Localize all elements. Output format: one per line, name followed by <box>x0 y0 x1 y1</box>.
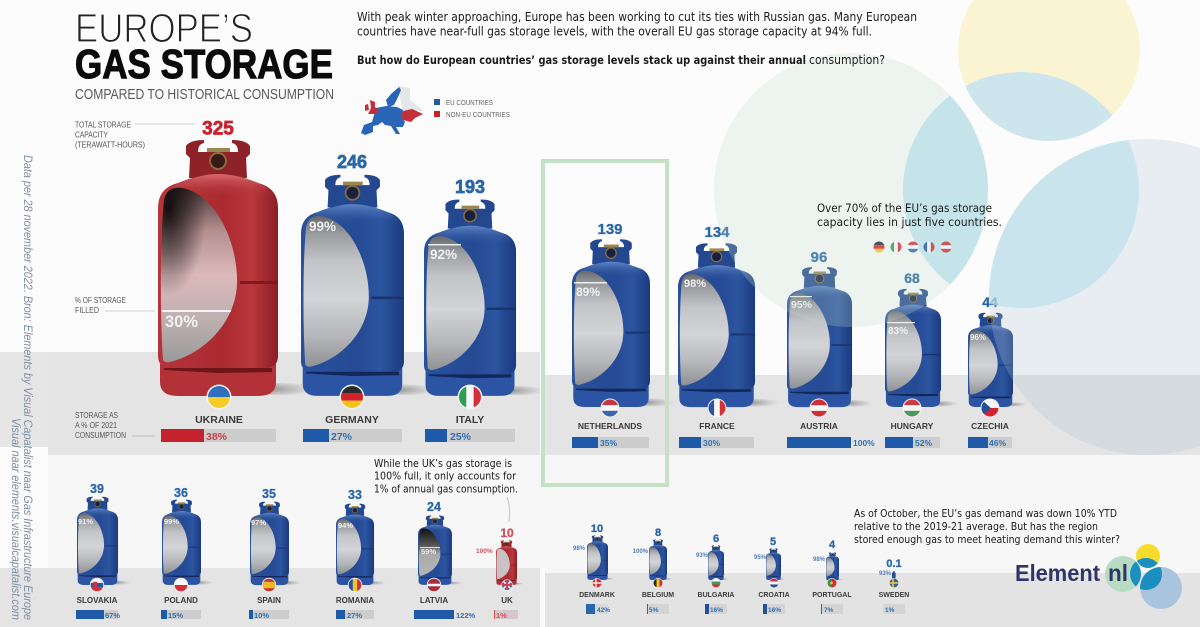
bar: France <box>679 437 754 448</box>
country: UK <box>476 526 524 620</box>
name: Ukraine: UKRAINE <box>195 414 243 426</box>
title: EUROPE’S <box>75 5 253 51</box>
bar: Italy: 25% <box>450 431 472 443</box>
cylinder: Italy <box>424 200 545 396</box>
capacity: Portugal: 4 <box>829 539 836 551</box>
cylinder: Hungary <box>885 289 959 407</box>
country: Slovakia <box>76 482 131 620</box>
title: GAS STORAGE <box>75 41 333 87</box>
bar: Austria: 100% <box>853 438 875 448</box>
flag: Austria <box>810 398 828 418</box>
flag: Hungary <box>902 398 922 418</box>
capacity: Croatia: 5 <box>770 536 776 548</box>
callout: UK: 1% of annual gas consumption. <box>374 484 518 496</box>
country: Belgium <box>633 527 674 614</box>
name: France: FRANCE <box>699 421 735 431</box>
legend: non-EU countries <box>434 111 510 119</box>
bar: Ukraine <box>161 429 276 443</box>
fill level: Netherlands: 89% <box>576 285 600 299</box>
legend: EU countries <box>434 99 493 107</box>
capacity: Austria: 96 <box>811 249 827 266</box>
bar: Croatia: 16% <box>768 607 781 614</box>
bar: Denmark: 42% <box>597 607 610 614</box>
annotation: percent of storage filled: % OF STORAGE <box>75 295 126 305</box>
capacity: Germany: 246 <box>337 152 367 172</box>
bar: Netherlands <box>572 437 649 448</box>
bar: UK: 1% <box>496 611 507 620</box>
flag: Slovakia <box>90 578 104 592</box>
text block: introduction: countries have near-full gas storage levels, with the overall EU gas storage capacity at 94% full. <box>357 24 872 38</box>
cylinder: Austria <box>787 267 873 407</box>
bar: Belgium: 5% <box>649 607 659 614</box>
map: Europe <box>361 86 424 135</box>
fill level: Croatia: 95% <box>754 555 767 561</box>
capacity: Bulgaria: 6 <box>713 533 719 545</box>
flag: Croatia <box>769 578 779 588</box>
fill level: Hungary <box>887 322 915 337</box>
cylinder: Belgium <box>649 539 673 580</box>
cylinder: Spain <box>250 502 301 585</box>
capacity: Latvia: 24 <box>427 500 441 514</box>
name: Belgium: BELGIUM <box>642 592 674 599</box>
bar: Ukraine: 38% <box>206 431 228 443</box>
country: Poland <box>161 486 213 620</box>
fill level: Spain: 97% <box>251 518 266 527</box>
bar: Hungary <box>885 437 940 448</box>
bar: Sweden: 1% <box>885 607 895 614</box>
fill level: Latvia: 59% <box>421 547 436 556</box>
bar: Bulgaria: 16% <box>710 607 723 614</box>
annotation: total storage capacity <box>75 120 195 150</box>
fill level: Bulgaria: 93% <box>696 553 709 559</box>
map legend <box>361 86 510 135</box>
flag: Sweden <box>889 578 899 588</box>
name: Spain: SPAIN <box>257 596 281 605</box>
cylinder: Poland <box>162 500 213 585</box>
bar: Slovakia: 67% <box>105 611 120 620</box>
flag: France <box>708 398 726 418</box>
fill level: Czechia: 96% <box>970 333 986 342</box>
annotation: percent of storage filled <box>75 295 155 315</box>
capacity: Poland: 36 <box>174 486 188 500</box>
logo: Element nl <box>1015 544 1182 609</box>
country: Romania <box>336 488 386 620</box>
bar: Germany <box>303 429 402 443</box>
capacity: France: 134 <box>704 224 730 241</box>
callout: five countries: capacity lies in just five countries. <box>817 215 1002 229</box>
annotation: total storage capacity: TOTAL STORAGE <box>75 120 131 130</box>
callout: five countries: Over 70% of the EU’s gas storage <box>817 201 992 215</box>
bar: Netherlands: 35% <box>600 438 617 448</box>
country: Austria <box>787 249 875 448</box>
annotation: storage as percent of consumption: STORAGE AS <box>75 410 118 420</box>
fill level: UK: 100% <box>476 548 493 555</box>
name: Hungary: HUNGARY <box>891 421 934 431</box>
flag: Germany <box>340 384 364 410</box>
callout: October demand <box>854 508 1120 546</box>
bar: Italy <box>425 429 515 443</box>
bar: Germany: 27% <box>331 431 353 443</box>
source note: Visual naar elements.visualcapatalist.com <box>9 418 21 620</box>
capacity: Ukraine: 325 <box>202 118 234 140</box>
text block: introduction: consumption? <box>809 53 885 67</box>
callout: October demand: As of October, the EU’s gas demand was down 10% YTD <box>854 508 1117 520</box>
cylinder: UK <box>496 540 524 585</box>
capacity: Romania: 33 <box>348 488 362 502</box>
cylinder: Slovakia <box>77 497 131 585</box>
fill level: Germany: 99% <box>309 219 336 234</box>
bar: Latvia: 122% <box>456 611 476 620</box>
fill level: Italy <box>428 244 461 262</box>
annotation: total storage capacity: (TERAWATT-HOURS) <box>75 140 145 150</box>
name: UK: UK <box>501 596 513 605</box>
source note <box>9 155 33 620</box>
fill level: Ukraine: 30% <box>165 313 198 331</box>
flag: Czechia <box>980 398 1000 418</box>
callout: UK <box>374 458 518 522</box>
cylinder: France <box>678 243 779 407</box>
cylinder: Czechia <box>968 313 1027 407</box>
country: Croatia <box>754 536 790 614</box>
flag: Denmark <box>592 578 602 588</box>
annotation: storage as percent of consumption: CONSUMPTION <box>75 430 126 440</box>
callout: October demand: relative to the 2019-21 average. But has the region <box>854 521 1098 533</box>
annotation: percent of storage filled: FILLED <box>75 305 99 315</box>
flag: Spain <box>262 578 276 592</box>
name: Austria: AUSTRIA <box>800 421 838 431</box>
panel: top row cylinders (left) <box>75 118 545 443</box>
fill level: Slovakia: 91% <box>78 517 93 526</box>
cylinder: Bulgaria <box>708 545 729 580</box>
name: Denmark: DENMARK <box>579 592 615 599</box>
cylinder: Denmark <box>587 535 615 580</box>
fill level: Poland: 99% <box>164 517 179 526</box>
name: Portugal: PORTUGAL <box>812 592 852 599</box>
flag: UK <box>501 579 513 591</box>
capacity: Sweden: 0.1 <box>886 558 902 570</box>
fill level: Italy: 92% <box>430 247 457 262</box>
flag: Bulgaria <box>711 578 721 588</box>
legend: EU countries: EU COUNTRIES <box>446 100 493 107</box>
fill level: Sweden: 93% <box>879 571 892 577</box>
annotation: storage as percent of consumption: A % OF 2021 <box>75 420 117 430</box>
icons: five flags <box>874 242 952 252</box>
fill level: France: 98% <box>684 278 706 290</box>
title: COMPARED TO HISTORICAL CONSUMPTION <box>75 87 334 103</box>
capacity: Italy: 193 <box>455 177 485 197</box>
capacity: Slovakia: 39 <box>90 482 104 496</box>
title <box>75 5 334 103</box>
cylinder: Sweden <box>892 571 897 579</box>
flag: Portugal <box>827 578 837 588</box>
country: Netherlands <box>572 221 675 448</box>
bar: Portugal: 7% <box>824 607 834 614</box>
panel: lower-right cylinders <box>573 523 909 614</box>
cylinder: Portugal <box>826 552 843 580</box>
cylinder: Germany <box>301 175 437 396</box>
capacity: Czechia: 44 <box>982 294 998 310</box>
country: Czechia <box>968 294 1027 448</box>
country: Sweden <box>879 558 909 614</box>
country: Latvia <box>414 500 476 620</box>
fill level: Belgium: 100% <box>633 549 649 555</box>
arrow: UK callout <box>507 497 510 522</box>
name: Croatia: CROATIA <box>758 592 790 599</box>
text block: introduction: But how do European countries’ gas storage levels stack up against their annual <box>357 53 806 67</box>
cylinder: Ukraine <box>158 140 316 396</box>
name: Slovakia: SLOVAKIA <box>77 596 118 605</box>
bar: Czechia <box>968 437 1012 448</box>
capacity: Denmark: 10 <box>591 523 603 535</box>
name: Germany: GERMANY <box>325 414 379 426</box>
fill level: Austria: 95% <box>791 299 813 311</box>
highlight box: Netherlands <box>543 161 667 485</box>
annotation: total storage capacity: CAPACITY <box>75 130 108 140</box>
fill level: Ukraine <box>162 310 231 331</box>
cylinder: Croatia <box>766 548 786 580</box>
bar: Austria <box>787 437 875 448</box>
logo: Element nl: Element <box>1015 560 1100 586</box>
legend: non-EU countries: NON-EU COUNTRIES <box>446 112 510 119</box>
text block: introduction <box>357 10 917 67</box>
bar: Poland: 15% <box>168 611 183 620</box>
bar: Spain: 10% <box>254 611 269 620</box>
annotation: storage as percent of consumption <box>75 410 155 440</box>
capacity: Hungary: 68 <box>904 270 920 286</box>
logo: Element nl: nl <box>1108 560 1128 586</box>
capacity: Belgium: 8 <box>655 527 661 539</box>
flag: Poland <box>174 578 188 592</box>
callout: UK: 100% full, it only accounts for <box>374 470 517 482</box>
name: Latvia: LATVIA <box>420 596 448 605</box>
flag: Romania <box>348 578 362 592</box>
fill level: Hungary: 83% <box>888 326 908 337</box>
country: Denmark <box>573 523 615 614</box>
name: Czechia: CZECHIA <box>971 421 1009 431</box>
fill level: Portugal: 98% <box>813 557 826 563</box>
country: Ukraine <box>158 118 316 443</box>
flag: Ukraine <box>206 384 232 410</box>
flag: Latvia <box>427 578 441 592</box>
name: Italy: ITALY <box>456 414 484 426</box>
bar: France: 30% <box>703 438 720 448</box>
cylinder: Romania <box>336 504 386 585</box>
name: Netherlands: NETHERLANDS <box>578 421 642 431</box>
decorative overlay circles <box>714 0 1200 455</box>
name: Poland: POLAND <box>164 596 198 605</box>
panel: top row cylinders (right) <box>572 221 1027 448</box>
capacity: Netherlands: 139 <box>597 221 623 238</box>
name: Sweden: SWEDEN <box>879 592 909 599</box>
country: France <box>678 224 779 448</box>
flag: Belgium <box>653 578 663 588</box>
capacity: Spain: 35 <box>262 487 276 501</box>
capacity: UK: 10 <box>500 526 514 540</box>
callout: five countries <box>817 201 1002 252</box>
country: Bulgaria <box>696 533 734 614</box>
panel: lower-left cylinders <box>76 482 524 620</box>
bar: Hungary: 52% <box>915 438 932 448</box>
bar: Czechia: 46% <box>989 438 1006 448</box>
cylinder: Latvia <box>418 516 463 585</box>
country: Spain <box>249 487 301 620</box>
country: Germany <box>301 152 437 443</box>
flag: Netherlands <box>600 398 620 418</box>
callout: October demand: stored enough gas to meet heating demand this winter? <box>854 534 1120 546</box>
name: Bulgaria: BULGARIA <box>698 592 734 599</box>
fill level: Netherlands <box>574 282 607 299</box>
cylinder: Netherlands <box>572 239 675 407</box>
name: Romania: ROMANIA <box>336 596 374 605</box>
callout: UK: While the UK’s gas storage is <box>374 458 512 470</box>
country: Portugal <box>812 539 852 614</box>
bar: Romania: 27% <box>347 611 362 620</box>
fill level: Romania: 94% <box>338 521 353 530</box>
fill level: Denmark: 98% <box>573 546 586 552</box>
country: Italy <box>424 177 545 443</box>
text block: introduction: With peak winter approaching, Europe has been working to cut its ties with Russian gas. Many European <box>357 10 917 24</box>
flag: Italy <box>458 384 482 410</box>
country: Hungary <box>885 270 959 448</box>
